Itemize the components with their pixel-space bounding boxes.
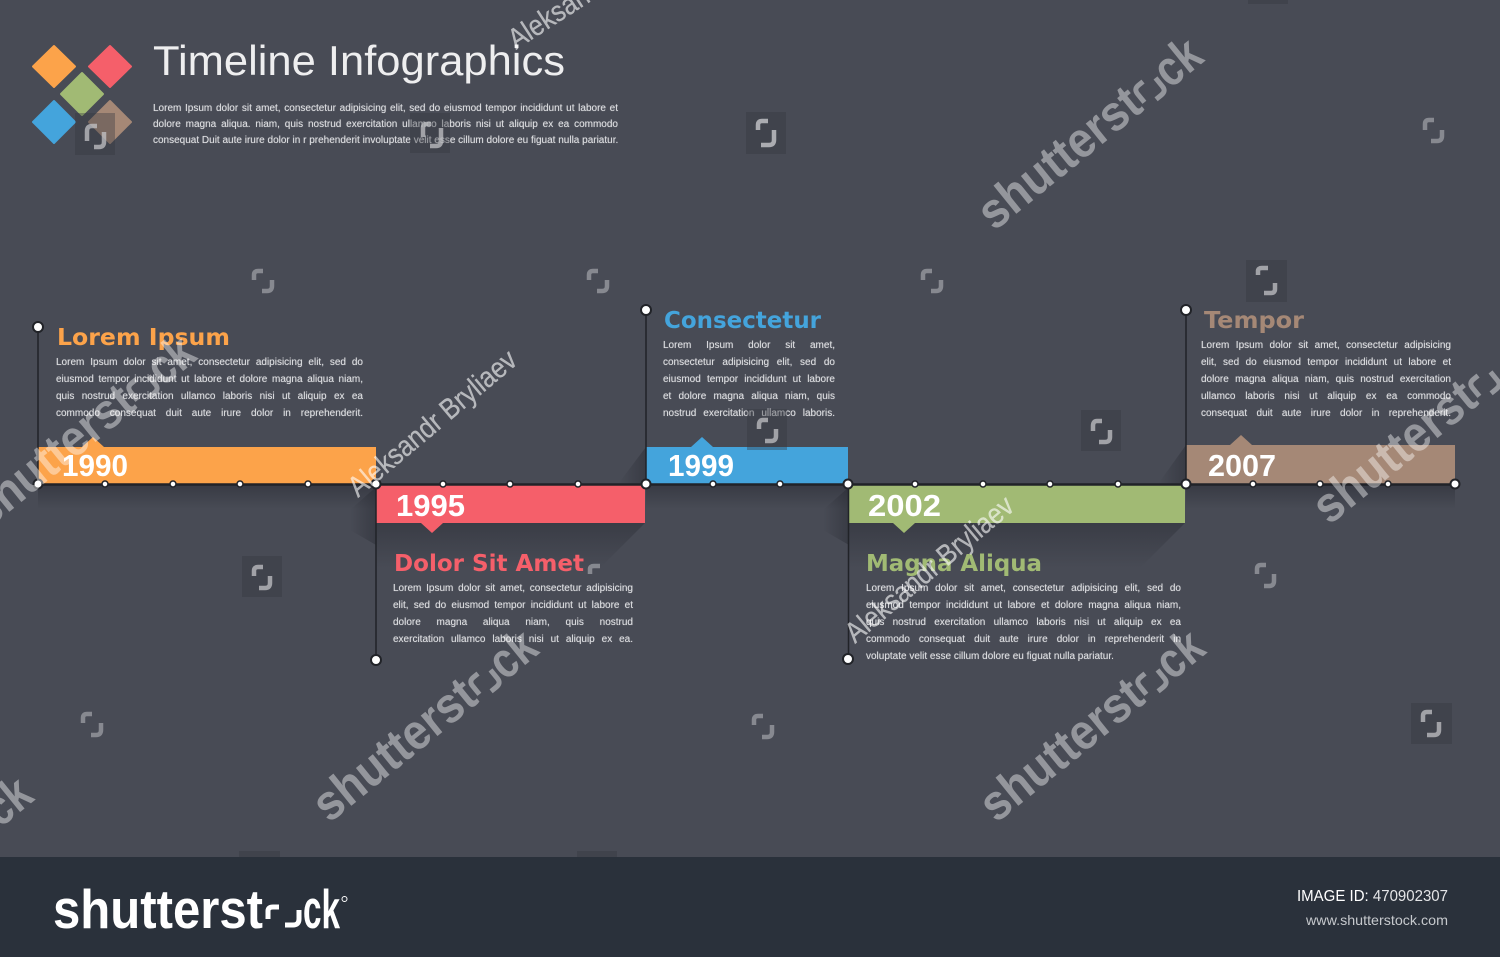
ribbon 2007: 2007 (1208, 448, 1276, 483)
website url: www.shutterstock.com (1305, 912, 1448, 928)
text block: Dolor Sit Amet: Lorem Ipsum dolor sit amet, consectetur adipisicing (393, 583, 633, 594)
heading: Lorem Ipsum: Lorem Ipsum (57, 325, 230, 351)
text block: Dolor Sit Amet: elit, sed do eiusmod tempor incididunt ut labore et (393, 600, 633, 611)
footer band (0, 857, 1500, 957)
text block: Consectetur: Lorem Ipsum dolor sit amet, (663, 340, 835, 351)
text block: Consectetur: eiusmod tempor incididunt ut labore (663, 374, 835, 385)
text block: Lorem Ipsum: Lorem Ipsum dolor sit amet, consectetur adipisicing elit, sed do (56, 357, 363, 368)
watermark: author name center-right: Aleksandr Bryliaev (839, 490, 1021, 649)
watermark: shutterstock top right: ck (1142, 25, 1213, 98)
watermark: shutterstock bottom center-left (301, 617, 548, 832)
text block: Magna Aliqua: Lorem Ipsum dolor sit amet, consectetur adipisicing elit, sed do (866, 583, 1181, 594)
ribbon 1990: 1990 (62, 448, 128, 483)
watermark: shutterstock right edge: shutterst (1301, 368, 1487, 534)
ribbon 1999 (646, 437, 848, 484)
text block: Magna Aliqua (866, 583, 1182, 662)
logo mark: four colored diamonds (33, 46, 131, 143)
ribbon 1999: 1999 (668, 448, 734, 483)
timeline axis with connector stems (38, 310, 1455, 660)
watermark: shutterstock left edge: ck (135, 323, 206, 396)
intro text: consequat Duit aute irure dolor in r prehenderit involuptate velit esse cillum dolore eu figuat nulla pariatur. (153, 135, 618, 146)
ribbon 1995: 1995 (396, 488, 465, 523)
watermark: shutterstock bottom right: ck (1144, 617, 1215, 690)
text block: Consectetur: consectetur adipisicing elit, sed do (663, 357, 835, 368)
watermark: shutterstock left edge (0, 323, 206, 538)
text block: Magna Aliqua: voluptate velit esse cillum dolore eu figuat nulla pariatur. (866, 651, 1114, 662)
text block: Tempor: elit, sed do eiusmod tempor incididunt ut labore et (1201, 357, 1451, 368)
ribbon 2007 (1186, 435, 1455, 484)
text block: Tempor: ullamco laboris nisi ut aliquip ex ea commodo (1201, 391, 1451, 402)
watermark: shutterstock bottom right (968, 617, 1215, 832)
intro text (153, 103, 618, 146)
ribbon 1995 (376, 485, 645, 533)
text block: Tempor: dolore magna aliqua niam, quis nostrud exercitation (1201, 374, 1451, 385)
watermark: author name center-left: Aleksandr Bryliaev (342, 344, 524, 503)
image id: IMAGE ID: 470902307 (1297, 888, 1448, 905)
text block: Tempor (1201, 340, 1452, 419)
text block: Tempor: Lorem Ipsum dolor sit amet, consectetur adipisicing (1201, 340, 1451, 351)
title: Timeline Infographics (153, 37, 565, 84)
footer logo: shutterst (53, 878, 263, 940)
heading: Tempor: Tempor (1204, 308, 1305, 334)
intro text: dolore magna aliqua. niam, quis nostrud exercitation ullamco laboris nisi ut aliquip ex ea commodo (153, 119, 618, 130)
text block: Lorem Ipsum: eiusmod tempor incididunt ut labore et dolore magna aliqua niam, (56, 374, 363, 385)
text block: Lorem Ipsum: commodo consequat duit aute irure dolor in reprehenderit. (56, 408, 363, 419)
large timeline nodes (33, 305, 1460, 665)
watermark: shutterstock top right: shutterst (966, 74, 1152, 240)
text block: Lorem Ipsum: quis nostrud exercitation ullamco laboris nisi ut aliquip ex ea (56, 391, 363, 402)
text block: Magna Aliqua: quis nostrud exercitation ullamco laboris nisi ut aliquip ex ea (866, 617, 1181, 628)
text block: Magna Aliqua: commodo consequat duit aute irure dolor in reprehenderit in (866, 634, 1181, 645)
footer logo: ck (303, 878, 340, 940)
long shadows under the ribbons (38, 445, 1455, 568)
intro text: Lorem Ipsum dolor sit amet, consectetur adipisicing elit, sed do eiusmod tempor incididunt ut labore et (153, 103, 618, 114)
text block: Consectetur (663, 340, 835, 419)
text block: Consectetur: et dolore magna aliqua niam, quis (663, 391, 835, 402)
text block: Lorem Ipsum (56, 357, 364, 419)
heading: Magna Aliqua: Magna Aliqua (866, 551, 1042, 577)
text block: Dolor Sit Amet: dolore magna aliqua niam, quis nostrud (393, 617, 633, 628)
heading: Dolor Sit Amet: Dolor Sit Amet (394, 551, 584, 577)
heading: Consectetur: Consectetur (664, 308, 822, 334)
ribbon 2002 (849, 485, 1185, 533)
text block: Dolor Sit Amet: exercitation ullamco laboris nisi ut aliquip ex ea. (393, 634, 633, 645)
watermark: shutterstock bottom right: shutterst (968, 666, 1154, 832)
ribbon 2002: 2002 (868, 488, 941, 523)
watermark: shutterstock bottom center-left: shutterst (301, 666, 487, 832)
text block: Magna Aliqua: eiusmod tempor incididunt ut labore et dolore magna aliqua niam, (866, 600, 1181, 611)
watermark: shutterstock top right (966, 25, 1213, 240)
ribbon 1990 (38, 437, 376, 484)
small timeline dots (102, 481, 1391, 487)
text block: Dolor Sit Amet (393, 583, 634, 645)
watermark: shutterstock bottom center-left: ck (477, 617, 548, 690)
text block: Tempor: consequat duit aute irure dolor in reprehenderit. (1201, 408, 1451, 419)
text block: Consectetur: nostrud exercitation ullamco laboris. (663, 408, 835, 419)
